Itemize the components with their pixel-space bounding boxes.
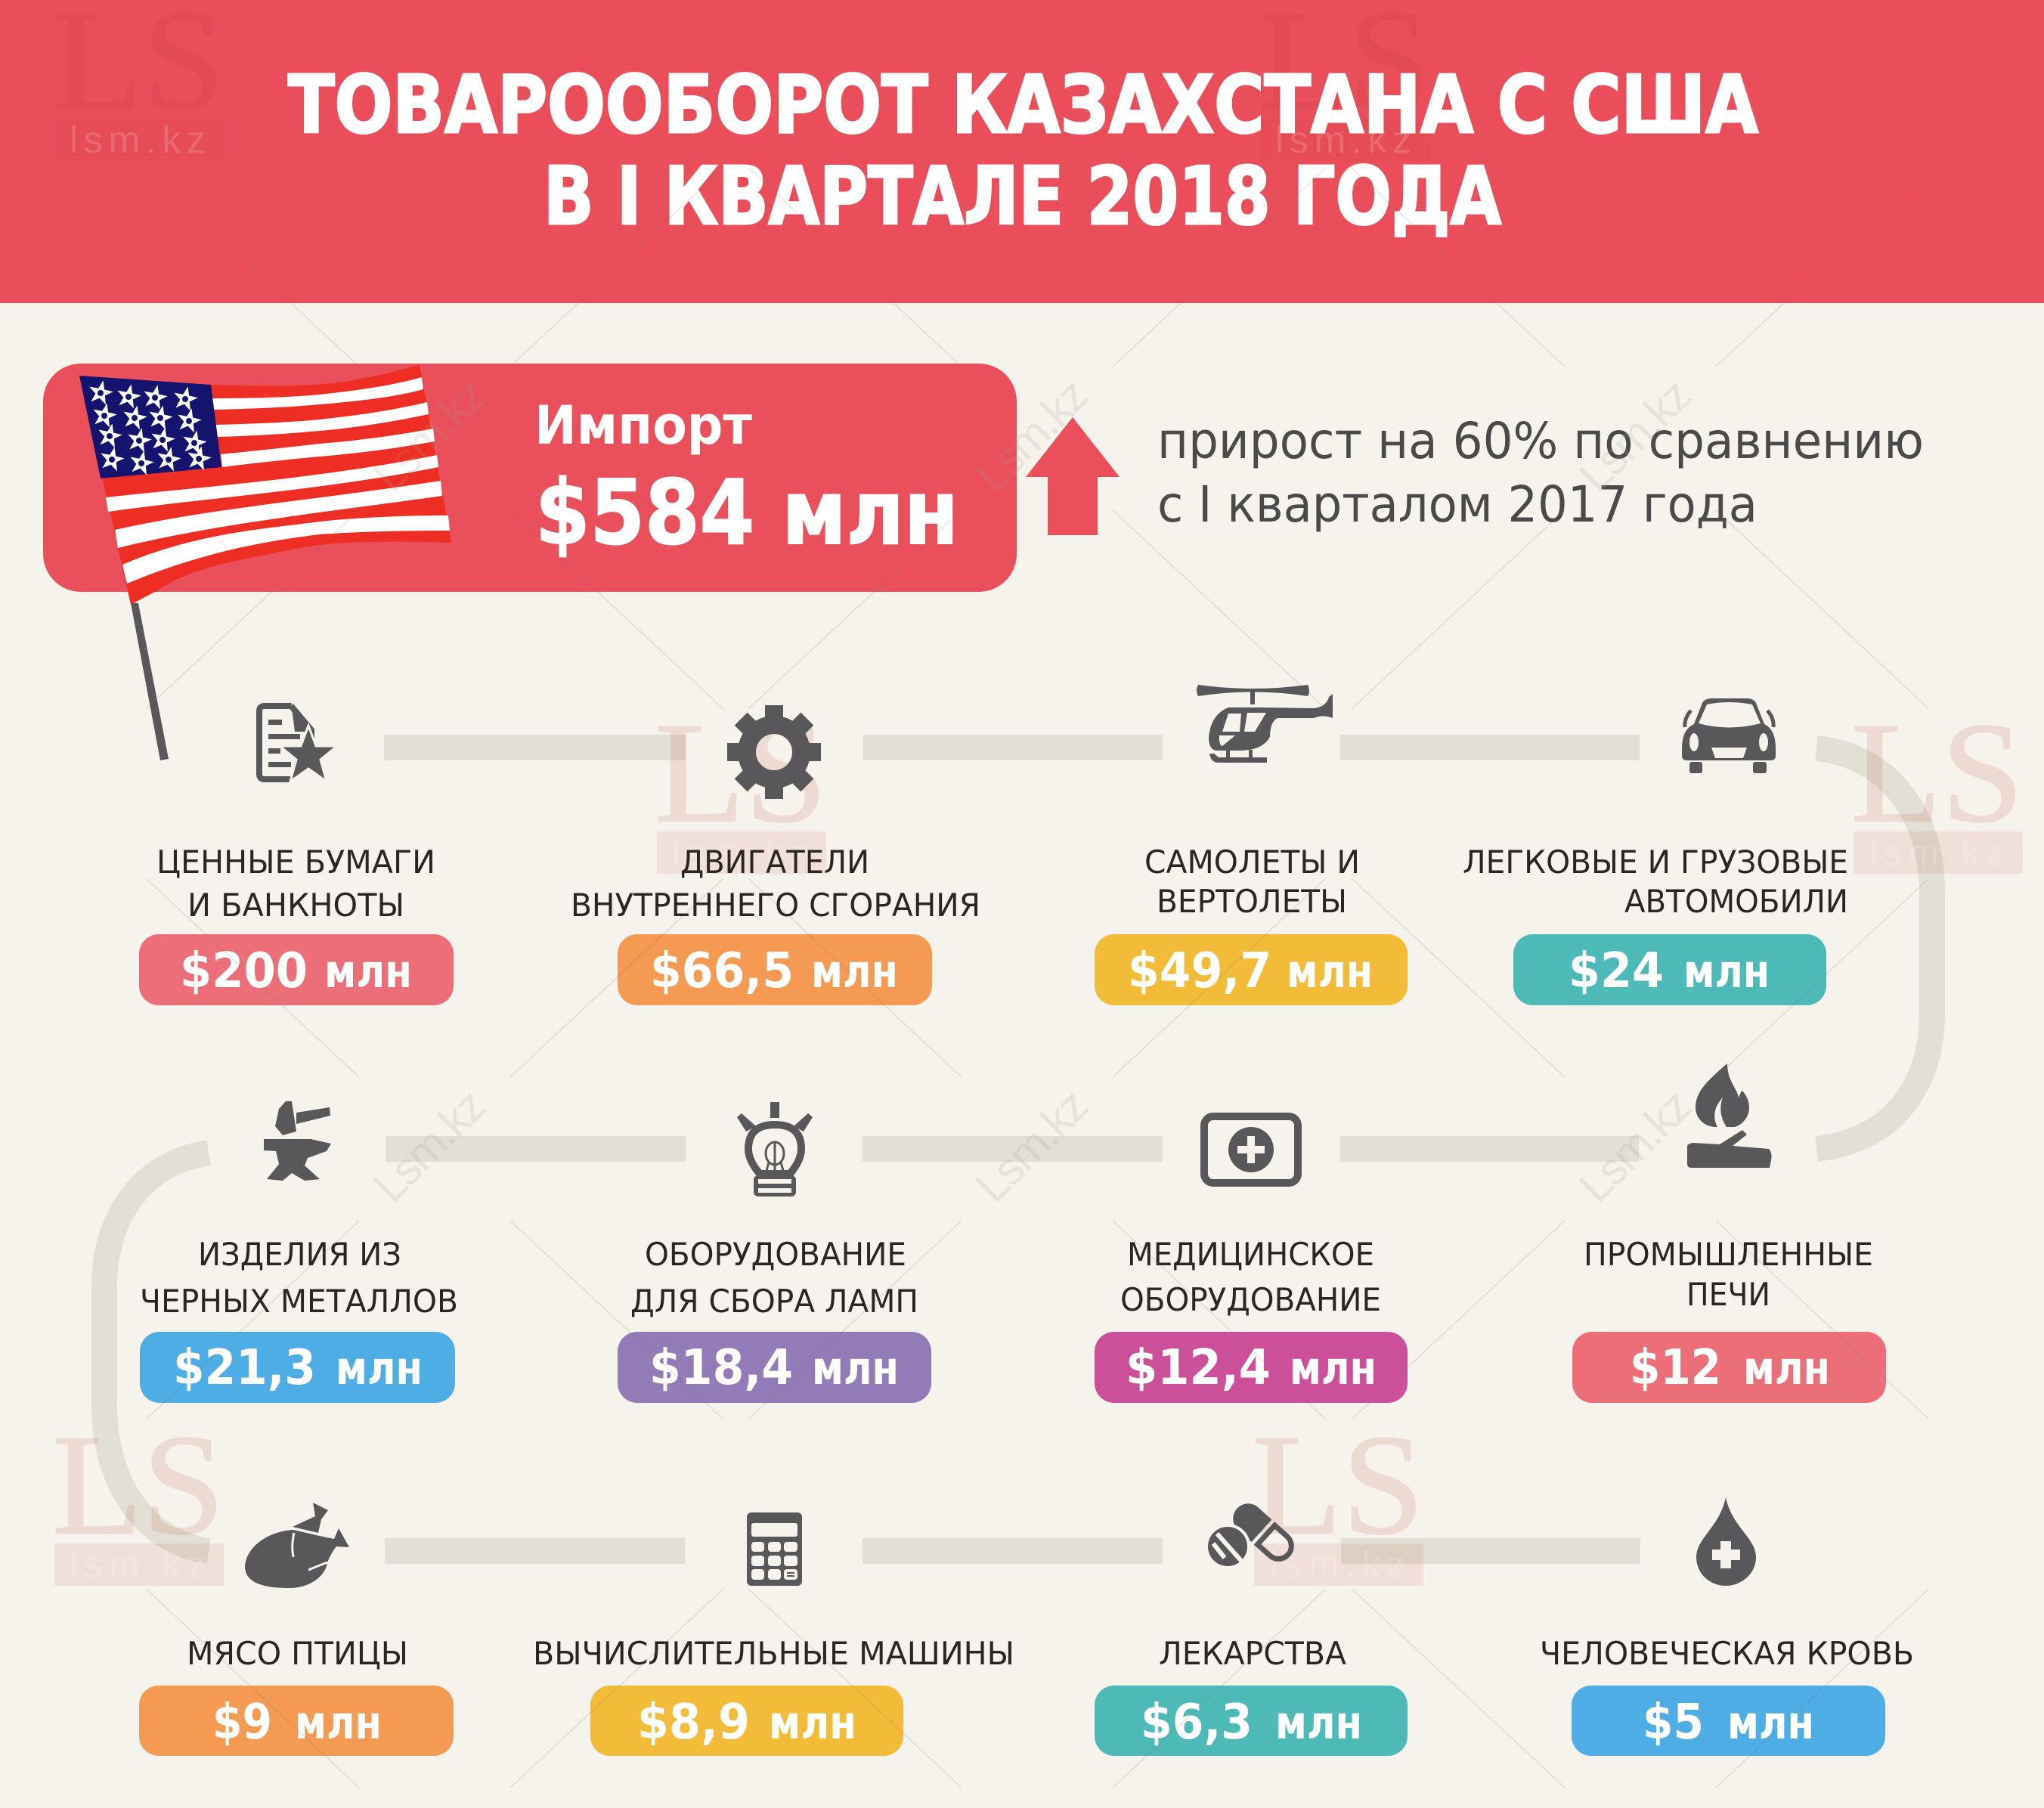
header band	[0, 0, 2044, 303]
pill: $21,3 млн	[140, 1332, 455, 1403]
pill: $18,4 млн	[618, 1332, 931, 1403]
label: poultry meat: МЯСО ПТИЦЫ	[187, 1635, 408, 1672]
rotated watermark texts: Lsm.kz	[966, 370, 1098, 501]
icon: anvil and hammer	[264, 1101, 331, 1181]
flag canton	[79, 376, 221, 478]
icon: light bulb	[737, 1102, 813, 1197]
watermark lower left: lsm.kz	[70, 1543, 206, 1586]
label: aircraft: ВЕРТОЛЕТЫ	[1157, 883, 1347, 920]
label: engines: ВНУТРЕННЕГО СГОРАНИЯ	[571, 887, 980, 924]
title	[288, 59, 1758, 243]
icon: pills	[1206, 1497, 1298, 1568]
icon: medical kit	[1204, 1116, 1298, 1183]
pill: $12,4 млн: млн	[1290, 1342, 1377, 1395]
flag	[79, 364, 451, 760]
label: engines: ДВИГАТЕЛИ	[680, 844, 869, 881]
label: aircraft: САМОЛЕТЫ И	[1144, 844, 1360, 881]
import panel	[43, 364, 1017, 592]
label: aircraft	[1144, 844, 1360, 920]
label: industrial furnaces: ПЕЧИ	[1686, 1276, 1770, 1313]
pill: $21,3 млн: $21,3	[173, 1340, 316, 1396]
label: medical equipment: МЕДИЦИНСКОЕ	[1127, 1236, 1374, 1273]
pill: $24 млн: $24	[1569, 943, 1664, 999]
pill: $49,7 млн	[1095, 934, 1408, 1005]
flag cloth	[79, 364, 451, 605]
rotated watermark texts	[364, 370, 1701, 1212]
label: cars: ЛЕГКОВЫЕ И ГРУЗОВЫЕ	[1463, 844, 1848, 881]
growth text	[1157, 412, 1924, 534]
label: ferrous metal products: ИЗДЕЛИЯ ИЗ	[198, 1236, 401, 1273]
pill: $66,5 млн: млн	[811, 945, 898, 998]
pill: $12 млн: млн	[1743, 1342, 1830, 1395]
pill: $9 млн: млн	[295, 1696, 382, 1750]
pill: $9 млн: $9	[212, 1695, 272, 1751]
icon: document with star	[259, 703, 337, 782]
label: cars: АВТОМОБИЛИ	[1624, 883, 1848, 920]
icon: fire and log	[1687, 1063, 1772, 1168]
rotated watermark texts: Lsm.kz	[1569, 370, 1701, 501]
pill: $12 млн	[1572, 1332, 1886, 1403]
watermark header left: lsm.kz	[70, 119, 206, 161]
icon: gear	[727, 705, 821, 799]
pill: $5 млн: $5	[1643, 1695, 1704, 1751]
pill: $6,3 млн: $6,3	[1141, 1695, 1253, 1751]
pill: $66,5 млн	[618, 934, 932, 1005]
rotated watermark texts: Lsm.kz	[364, 370, 495, 501]
watermark lower right: LS	[1252, 1406, 1424, 1565]
arrow up	[1026, 417, 1120, 535]
label: ferrous metal products	[140, 1236, 458, 1320]
watermark right: LS	[1851, 694, 2024, 853]
import label: Импорт	[534, 395, 752, 457]
pill: $18,4 млн: млн	[812, 1342, 899, 1395]
pill: $49,7 млн: $49,7	[1128, 943, 1271, 999]
watermark lower left: LS	[52, 1406, 225, 1565]
label: engines	[571, 844, 980, 924]
label: cars	[1463, 844, 1848, 920]
flag stars	[87, 378, 213, 476]
label: industrial furnaces	[1584, 1236, 1873, 1313]
icon: poultry	[245, 1503, 349, 1588]
label: computers: ВЫЧИСЛИТЕЛЬНЫЕ МАШИНЫ	[533, 1635, 1014, 1672]
pill: $9 млн	[139, 1686, 454, 1756]
icon: car	[1682, 698, 1776, 773]
title: В I КВАРТАЛЕ 2018 ГОДА	[544, 150, 1501, 243]
pill: $12,4 млн	[1095, 1332, 1408, 1403]
pill: $200 млн: млн	[324, 945, 412, 998]
pill: $66,5 млн: $66,5	[650, 943, 794, 999]
curved connector right	[1816, 748, 1932, 1149]
rotated watermark texts: Lsm.kz	[1569, 1080, 1701, 1212]
label: medicines: ЛЕКАРСТВА	[1159, 1635, 1346, 1672]
icon: helicopter	[1197, 685, 1333, 763]
label: ferrous metal products: ЧЕРНЫХ МЕТАЛЛОВ	[140, 1283, 458, 1320]
title: ТОВАРООБОРОТ КАЗАХСТАНА С США	[288, 59, 1758, 151]
icon: blood drop	[1696, 1497, 1756, 1586]
star centres	[98, 390, 202, 466]
pill: $8,9 млн: $8,9	[637, 1695, 750, 1751]
connector bars	[384, 735, 1640, 1564]
label: securities: ЦЕННЫЕ БУМАГИ	[156, 844, 435, 881]
pill: $18,4 млн: $18,4	[649, 1340, 793, 1396]
label: medical equipment	[1120, 1236, 1381, 1318]
pill: $21,3 млн: млн	[336, 1342, 423, 1395]
pill: $8,9 млн: млн	[769, 1696, 856, 1750]
flag pole	[131, 603, 169, 760]
pill: $5 млн	[1572, 1686, 1885, 1756]
pill: $200 млн: $200	[180, 943, 308, 999]
watermark right: lsm.kz	[1869, 831, 2005, 874]
pill: $12,4 млн: $12,4	[1126, 1340, 1271, 1396]
label: lamp assembly equipment: ОБОРУДОВАНИЕ	[645, 1236, 906, 1273]
pill: $6,3 млн	[1095, 1686, 1408, 1756]
import value: $584 млн	[535, 460, 959, 565]
watermark lower right: lsm.kz	[1269, 1543, 1405, 1586]
pill: $24 млн: млн	[1683, 945, 1770, 998]
growth text: с I кварталом 2017 года	[1157, 475, 1758, 534]
label: lamp assembly equipment: ДЛЯ СБОРА ЛАМП	[630, 1283, 918, 1320]
flag stripes	[106, 377, 450, 584]
label: securities: И БАНКНОТЫ	[187, 887, 404, 924]
label: medical equipment: ОБОРУДОВАНИЕ	[1120, 1281, 1381, 1318]
curved connector left	[104, 1153, 209, 1551]
label: securities	[156, 844, 435, 924]
pill: $6,3 млн: млн	[1275, 1696, 1362, 1750]
growth text: прирост на 60% по сравнению	[1157, 412, 1924, 470]
pill: $5 млн: млн	[1727, 1696, 1814, 1750]
label: lamp assembly equipment	[630, 1236, 918, 1320]
watermark middle: lsm.kz	[672, 831, 808, 874]
label: human blood: ЧЕЛОВЕЧЕСКАЯ КРОВЬ	[1540, 1635, 1914, 1672]
pill: $12 млн: $12	[1630, 1340, 1721, 1396]
watermark middle: LS	[655, 694, 827, 853]
pill: $200 млн	[139, 934, 454, 1005]
pill: $8,9 млн	[590, 1686, 903, 1756]
pill: $49,7 млн: млн	[1287, 945, 1373, 998]
label: industrial furnaces: ПРОМЫШЛЕННЫЕ	[1584, 1236, 1873, 1273]
rotated watermark texts: Lsm.kz	[364, 1080, 495, 1212]
icon: calculator	[747, 1512, 802, 1586]
pill: $24 млн	[1513, 934, 1826, 1005]
rotated watermark texts: Lsm.kz	[966, 1080, 1098, 1212]
watermark header right: lsm.kz	[1275, 119, 1411, 161]
